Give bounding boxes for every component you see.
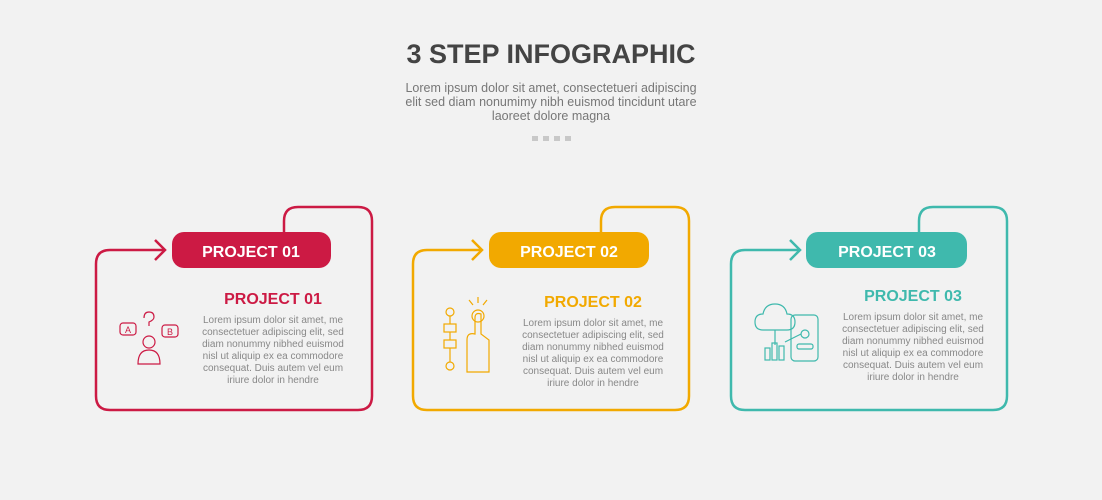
panel: project 02: PROJECT 02 [520,244,618,261]
panel: project 02: diam nonummy nibhed euismod [522,342,664,353]
subtitle: laoreet dolore magna [492,109,610,123]
subtitle [405,81,697,123]
panel: project 01: PROJECT 01 [202,244,300,261]
panel: project 03: nisl ut aliquip ex ea commodore [843,348,984,359]
panel: project 03: diam nonummy nibhed euismod [842,336,984,347]
panel: project 01 [96,207,372,410]
panel: project 02: Lorem ipsum dolor sit amet, me [523,318,663,329]
panel: project 01: PROJECT 01 [224,291,322,308]
panel: project 02: consectetuer adipiscing elit, sed [522,330,664,341]
panel: project 01: nisl ut aliquip ex ea commodore [203,351,344,362]
icon: cloud and phone [755,304,818,361]
subtitle: Lorem ipsum dolor sit amet, consectetueri adipiscing [405,81,697,95]
panel: project 01: Lorem ipsum dolor sit amet, me [203,315,343,326]
panel: project 02: iriure dolor in hendre [547,378,639,389]
panel: project 03: consectetuer adipiscing elit, sed [842,324,984,335]
panel: project 03: iriure dolor in hendre [867,372,959,383]
panel: project 01: consequat. Duis autem vel eum [203,363,343,374]
panel: project 03 [731,207,1007,410]
icon: person with A/B question: B [167,327,173,337]
icon: person with A/B question [120,312,178,364]
panel: project 02: nisl ut aliquip ex ea commodore [523,354,664,365]
subtitle: elit sed diam nonumimy nibh euismod tincidunt utare [405,95,697,109]
panel: project 01: diam nonummy nibhed euismod [202,339,344,350]
panel: project 02: PROJECT 02 [544,294,642,311]
title: 3 STEP INFOGRAPHIC [406,39,696,69]
icon: person with A/B question: A [125,325,131,335]
panel: project 02: consequat. Duis autem vel eum [523,366,663,377]
panel: project 03: consequat. Duis autem vel eum [843,360,983,371]
panel: project 01: consectetuer adipiscing elit, sed [202,327,344,338]
icon: robot hand flow [444,297,489,372]
panel: project 03: PROJECT 03 [864,288,962,305]
panel: project 03: PROJECT 03 [838,244,936,261]
panel: project 03: Lorem ipsum dolor sit amet, me [843,312,983,323]
panel: project 02 [413,207,689,410]
panel: project 01: iriure dolor in hendre [227,375,319,386]
dots [532,136,571,141]
